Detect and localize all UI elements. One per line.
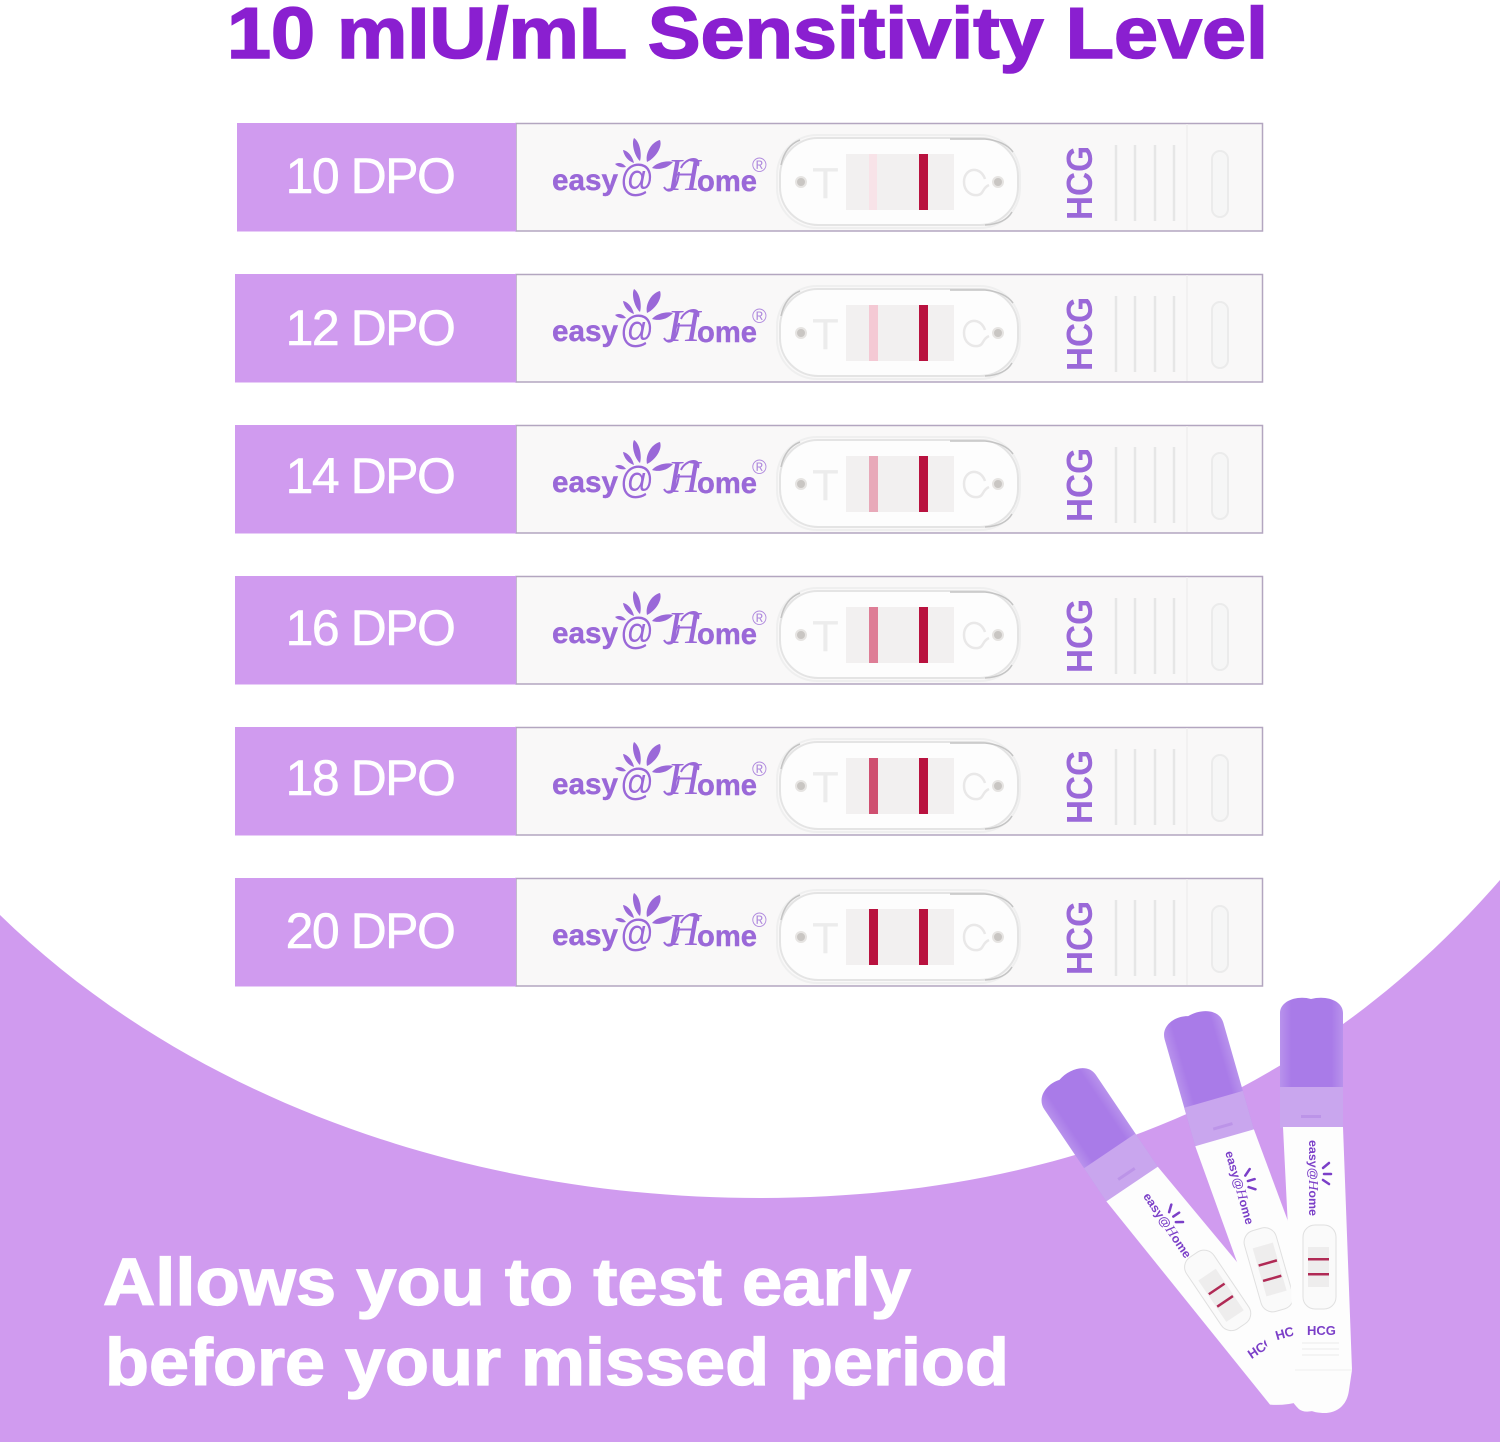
test strip: 10 DPO: HCG <box>1059 146 1100 220</box>
test strip: 20 DPO <box>235 878 1262 986</box>
test strip: 14 DPO: @ <box>620 460 654 502</box>
test strip: 20 DPO: H <box>666 904 703 955</box>
bottom tagline <box>103 1245 1009 1400</box>
test strip: 12 DPO: 12 DPO <box>286 300 454 356</box>
test strip: 20 DPO: ome <box>697 920 757 953</box>
test strip: 20 DPO: 20 DPO <box>286 903 454 959</box>
test pen: middle <box>1160 1001 1351 1422</box>
test strip: 16 DPO: T <box>812 612 839 661</box>
test strip: 18 DPO: ® <box>752 759 767 781</box>
test strip: 16 DPO <box>235 576 1262 684</box>
test strip: 10 DPO: H <box>666 149 703 200</box>
test pen: middle: easy@Home <box>1221 1149 1257 1227</box>
test strip: 18 DPO: easy <box>552 768 618 801</box>
test strip: 14 DPO: easy <box>552 466 618 499</box>
test strip: 10 DPO: ome <box>697 165 757 198</box>
test strip: 14 DPO: H <box>666 451 703 502</box>
test pen: left: easy@Home <box>1139 1190 1194 1262</box>
test strip: 12 DPO: HCG <box>1059 297 1100 371</box>
test strip: 18 DPO: 18 DPO <box>286 750 454 806</box>
test strip: 12 DPO: ® <box>752 306 767 328</box>
test strip: 20 DPO: ® <box>752 910 767 932</box>
test strip: 16 DPO: @ <box>620 611 654 653</box>
test strip: 10 DPO: @ <box>620 158 654 200</box>
test strip: 10 DPO: easy <box>552 164 618 197</box>
test strip: 18 DPO <box>235 727 1262 836</box>
test strip: 12 DPO: @ <box>620 309 654 351</box>
test strip: 10 DPO: ® <box>752 155 767 177</box>
test strip: 16 DPO: ome <box>697 618 757 651</box>
test strip: 20 DPO: HCG <box>1059 901 1100 975</box>
test strip: 16 DPO: ® <box>752 608 767 630</box>
test strip: 12 DPO: ome <box>697 316 757 349</box>
test strip: 18 DPO: @ <box>620 762 654 804</box>
test strip: 16 DPO: HCG <box>1059 599 1100 673</box>
test strip: 10 DPO <box>237 123 1262 232</box>
bottom tagline: before your missed period <box>105 1325 1009 1400</box>
test strip: 14 DPO: T <box>812 461 839 510</box>
test strip: 14 DPO: HCG <box>1059 448 1100 522</box>
test strip: 12 DPO: easy <box>552 315 618 348</box>
test strip: 14 DPO: ome <box>697 467 757 500</box>
test strip: 20 DPO: easy <box>552 919 618 952</box>
test pen: right: easy@ H ome <box>1305 1140 1320 1216</box>
test strip: 14 DPO <box>235 425 1262 534</box>
test pen: left <box>1035 1047 1331 1429</box>
test strip: 16 DPO: easy <box>552 617 618 650</box>
test strip: 12 DPO <box>235 274 1262 382</box>
test pen: middle: HCG <box>1274 1321 1306 1343</box>
test strip: 14 DPO: 14 DPO <box>286 448 454 504</box>
test strip: 20 DPO: T <box>812 914 839 963</box>
test strip: 20 DPO: @ <box>620 913 654 955</box>
bottom tagline: Allows you to test early <box>103 1245 911 1320</box>
test strip: 16 DPO: 16 DPO <box>286 600 454 656</box>
test strip: 18 DPO: HCG <box>1059 750 1100 824</box>
test strip: 18 DPO: T <box>812 763 839 812</box>
test strip: 10 DPO: T <box>812 159 839 208</box>
purple curved background <box>0 880 1500 1442</box>
test strip: 16 DPO: H <box>666 602 703 653</box>
test strip: 10 DPO: 10 DPO <box>286 148 454 204</box>
test pen: left: HCG <box>1245 1333 1277 1362</box>
test pen: right <box>1280 998 1352 1413</box>
test strip: 12 DPO: H <box>666 300 703 351</box>
test pen: right: HCG <box>1307 1323 1336 1338</box>
test strip: 14 DPO: ® <box>752 457 767 479</box>
test strip: 18 DPO: H <box>666 753 703 804</box>
test strip: 18 DPO: ome <box>697 769 757 802</box>
test strip: 12 DPO: T <box>812 310 839 359</box>
